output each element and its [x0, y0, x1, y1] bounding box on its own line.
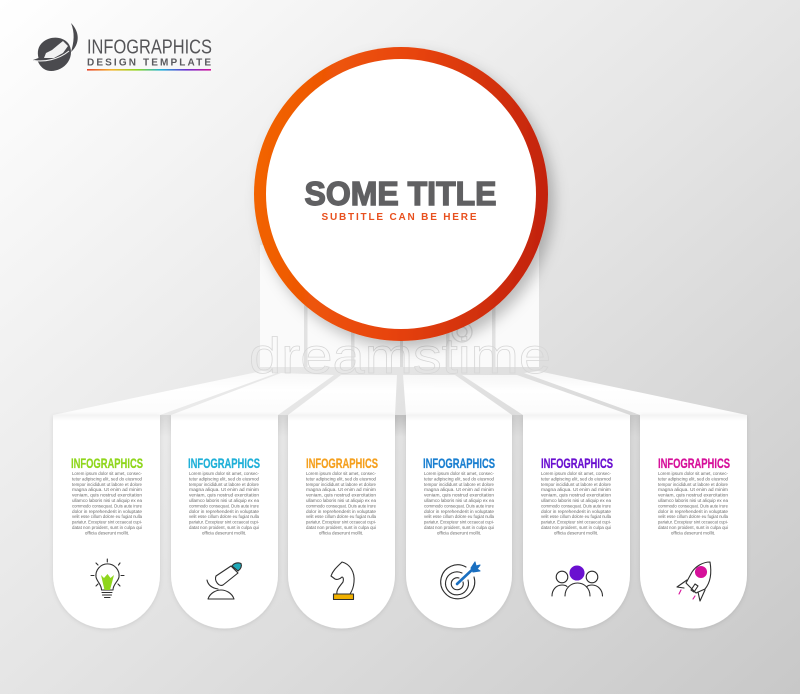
- icon: rocket: [677, 562, 711, 601]
- gap shadows between panels: [160, 415, 640, 437]
- heading: INFOGRAPHICS: [306, 455, 378, 471]
- text block: veniam, quis nostrud exercitation: [424, 493, 494, 498]
- icon: logo mark: [33, 23, 78, 71]
- text block: commodo consequat. Duis aute irure: [424, 503, 494, 508]
- text block: commodo consequat. Duis aute irure: [541, 503, 611, 508]
- text block: ullamco laboris nisi ut aliquip ex ea: [424, 498, 494, 503]
- text block: Lorem ipsum dolor sit amet, consec-: [306, 471, 376, 476]
- icon: chess knight: [331, 562, 354, 600]
- text block: Lorem ipsum dolor sit amet, consec-: [189, 471, 259, 476]
- text block: tempor incididunt ut labore et dolore: [424, 482, 494, 487]
- text block: magna aliqua. Ut enim ad minim: [189, 487, 259, 492]
- logo: [33, 23, 212, 71]
- text block: [189, 471, 259, 535]
- text block: datat non proident, sunt in culpa qui: [658, 525, 728, 530]
- title: SOME TITLE: [304, 175, 496, 212]
- panel: step 1: [53, 415, 160, 628]
- text block: dolor in reprehenderit in voluptate: [189, 509, 259, 514]
- text block: commodo consequat. Duis aute irure: [189, 503, 259, 508]
- panel: step 2: [171, 415, 278, 628]
- text block: velit esse cillum dolore eu fugiat nulla: [541, 514, 611, 519]
- text block: officia deserunt mollit.: [202, 530, 246, 535]
- text block: magna aliqua. Ut enim ad minim: [306, 487, 376, 492]
- text block: magna aliqua. Ut enim ad minim: [424, 487, 494, 492]
- text block: velit esse cillum dolore eu fugiat nulla: [189, 514, 259, 519]
- panel: step 3: [288, 415, 395, 628]
- text block: commodo consequat. Duis aute irure: [72, 503, 142, 508]
- heading: INFOGRAPHICS: [658, 455, 730, 471]
- text block: Lorem ipsum dolor sit amet, consec-: [72, 471, 142, 476]
- panel: step 6: [640, 415, 747, 628]
- text block: datat non proident, sunt in culpa qui: [424, 525, 494, 530]
- text block: pariatur. Excepteur sint occaecat cupi-: [658, 520, 728, 525]
- icon: microscope: [207, 563, 241, 599]
- circle badge: [254, 47, 548, 341]
- text block: commodo consequat. Duis aute irure: [306, 503, 376, 508]
- text block: dolor in reprehenderit in voluptate: [306, 509, 376, 514]
- text block: velit esse cillum dolore eu fugiat nulla: [658, 514, 728, 519]
- text block: dolor in reprehenderit in voluptate: [424, 509, 494, 514]
- panel: step 4: [406, 415, 512, 628]
- text block: tetur adipiscing elit, sed do eiusmod: [658, 476, 728, 481]
- text block: tetur adipiscing elit, sed do eiusmod: [306, 476, 376, 481]
- text block: pariatur. Excepteur sint occaecat cupi-: [72, 520, 142, 525]
- text block: dolor in reprehenderit in voluptate: [658, 509, 728, 514]
- text block: ullamco laboris nisi ut aliquip ex ea: [541, 498, 611, 503]
- text block: tetur adipiscing elit, sed do eiusmod: [189, 476, 259, 481]
- text block: datat non proident, sunt in culpa qui: [541, 525, 611, 530]
- fan connecting stem to panels: [53, 371, 747, 415]
- text block: tempor incididunt ut labore et dolore: [72, 482, 142, 487]
- text block: ullamco laboris nisi ut aliquip ex ea: [72, 498, 142, 503]
- heading: INFOGRAPHICS: [541, 455, 613, 471]
- text block: officia deserunt mollit.: [85, 530, 129, 535]
- logo title: INFOGRAPHICS: [87, 36, 212, 58]
- text block: officia deserunt mollit.: [437, 530, 481, 535]
- text block: veniam, quis nostrud exercitation: [306, 493, 376, 498]
- text block: Lorem ipsum dolor sit amet, consec-: [658, 471, 728, 476]
- text block: [658, 471, 728, 535]
- icon: team: [552, 566, 602, 596]
- text block: [541, 471, 611, 535]
- text block: velit esse cillum dolore eu fugiat nulla: [306, 514, 376, 519]
- text block: veniam, quis nostrud exercitation: [658, 493, 728, 498]
- text block: ullamco laboris nisi ut aliquip ex ea: [306, 498, 376, 503]
- text block: Lorem ipsum dolor sit amet, consec-: [541, 471, 611, 476]
- text block: pariatur. Excepteur sint occaecat cupi-: [541, 520, 611, 525]
- text block: magna aliqua. Ut enim ad minim: [658, 487, 728, 492]
- white disc: [266, 59, 536, 329]
- panel: upper stem with folds: [260, 245, 539, 367]
- text block: magna aliqua. Ut enim ad minim: [72, 487, 142, 492]
- text block: tempor incididunt ut labore et dolore: [306, 482, 376, 487]
- text block: veniam, quis nostrud exercitation: [189, 493, 259, 498]
- orange ring: [254, 47, 548, 341]
- text block: officia deserunt mollit.: [319, 530, 363, 535]
- text block: Lorem ipsum dolor sit amet, consec-: [424, 471, 494, 476]
- text block: datat non proident, sunt in culpa qui: [306, 525, 376, 530]
- text block: dolor in reprehenderit in voluptate: [72, 509, 142, 514]
- subtitle: SUBTITLE CAN BE HERE: [322, 212, 477, 223]
- text block: dolor in reprehenderit in voluptate: [541, 509, 611, 514]
- text block: [306, 471, 376, 535]
- text block: pariatur. Excepteur sint occaecat cupi-: [424, 520, 494, 525]
- text block: velit esse cillum dolore eu fugiat nulla: [424, 514, 494, 519]
- text block: tempor incididunt ut labore et dolore: [541, 482, 611, 487]
- text block: veniam, quis nostrud exercitation: [541, 493, 611, 498]
- text block: datat non proident, sunt in culpa qui: [72, 525, 142, 530]
- text block: ullamco laboris nisi ut aliquip ex ea: [658, 498, 728, 503]
- text block: tetur adipiscing elit, sed do eiusmod: [424, 476, 494, 481]
- text block: officia deserunt mollit.: [671, 530, 715, 535]
- icon: light bulb: [91, 559, 124, 598]
- text block: tetur adipiscing elit, sed do eiusmod: [541, 476, 611, 481]
- text block: magna aliqua. Ut enim ad minim: [541, 487, 611, 492]
- text block: ullamco laboris nisi ut aliquip ex ea: [189, 498, 259, 503]
- icon: target with arrow: [441, 562, 480, 599]
- logo subtitle: DESIGN TEMPLATE: [87, 58, 211, 68]
- text block: [72, 471, 142, 535]
- text block: commodo consequat. Duis aute irure: [658, 503, 728, 508]
- text block: pariatur. Excepteur sint occaecat cupi-: [189, 520, 259, 525]
- watermark: dreamstime: [249, 328, 551, 384]
- text block: pariatur. Excepteur sint occaecat cupi-: [306, 520, 376, 525]
- text block: velit esse cillum dolore eu fugiat nulla: [72, 514, 142, 519]
- rainbow line: [87, 69, 211, 71]
- text block: tempor incididunt ut labore et dolore: [658, 482, 728, 487]
- text block: datat non proident, sunt in culpa qui: [189, 525, 259, 530]
- heading: INFOGRAPHICS: [71, 455, 143, 471]
- text block: tempor incididunt ut labore et dolore: [189, 482, 259, 487]
- text block: officia deserunt mollit.: [554, 530, 598, 535]
- heading: INFOGRAPHICS: [423, 455, 495, 471]
- text block: veniam, quis nostrud exercitation: [72, 493, 142, 498]
- panel: step 5: [523, 415, 630, 628]
- text block: [424, 471, 494, 535]
- text block: tetur adipiscing elit, sed do eiusmod: [72, 476, 142, 481]
- heading: INFOGRAPHICS: [188, 455, 260, 471]
